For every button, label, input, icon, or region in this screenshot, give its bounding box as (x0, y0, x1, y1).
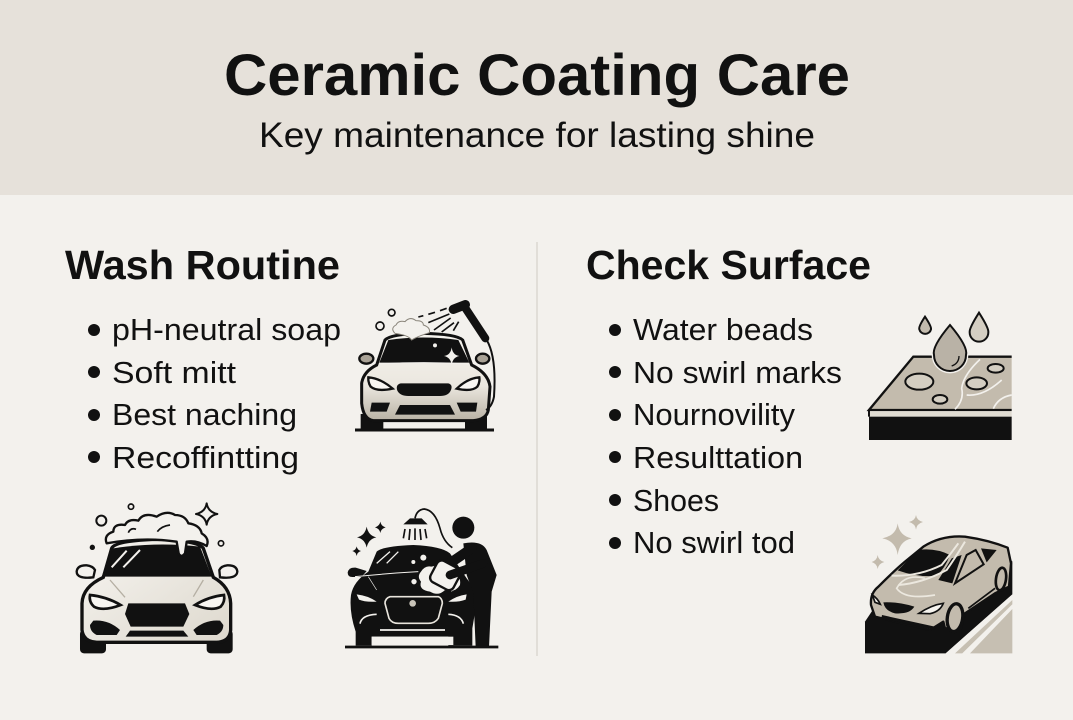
icon: person hand-washing car (345, 509, 498, 647)
icon: foam-covered car (77, 503, 237, 653)
panel: wash routine (65, 242, 498, 653)
icon: water beads on surface (869, 313, 1012, 440)
icon: glossy car with sparkles (865, 515, 1012, 653)
divider (536, 242, 538, 656)
heading: wash routine: Wash Routine (65, 242, 340, 288)
icon: car under shower head (355, 305, 495, 430)
heading: check surface: Check Surface (586, 242, 871, 288)
check surface list (609, 312, 842, 560)
header band (0, 0, 1073, 195)
check surface list: Resulttation (633, 440, 803, 475)
check surface list: Shoes (633, 483, 719, 518)
wash routine list: Soft mitt (112, 355, 236, 390)
wash routine list: Best naching (112, 397, 297, 432)
check surface list: No swirl marks (633, 355, 842, 390)
check surface list: No swirl tod (633, 525, 795, 560)
wash routine list (88, 312, 341, 475)
wash routine list: pH-neutral soap (112, 312, 341, 347)
wash routine list: Recoffintting (112, 440, 299, 475)
subtitle: Key maintenance for lasting shine (259, 116, 815, 155)
check surface list: Water beads (633, 312, 813, 347)
check surface list: Nournovility (633, 397, 795, 432)
title: Ceramic Coating Care (224, 43, 850, 108)
panel: check surface (586, 242, 1012, 653)
